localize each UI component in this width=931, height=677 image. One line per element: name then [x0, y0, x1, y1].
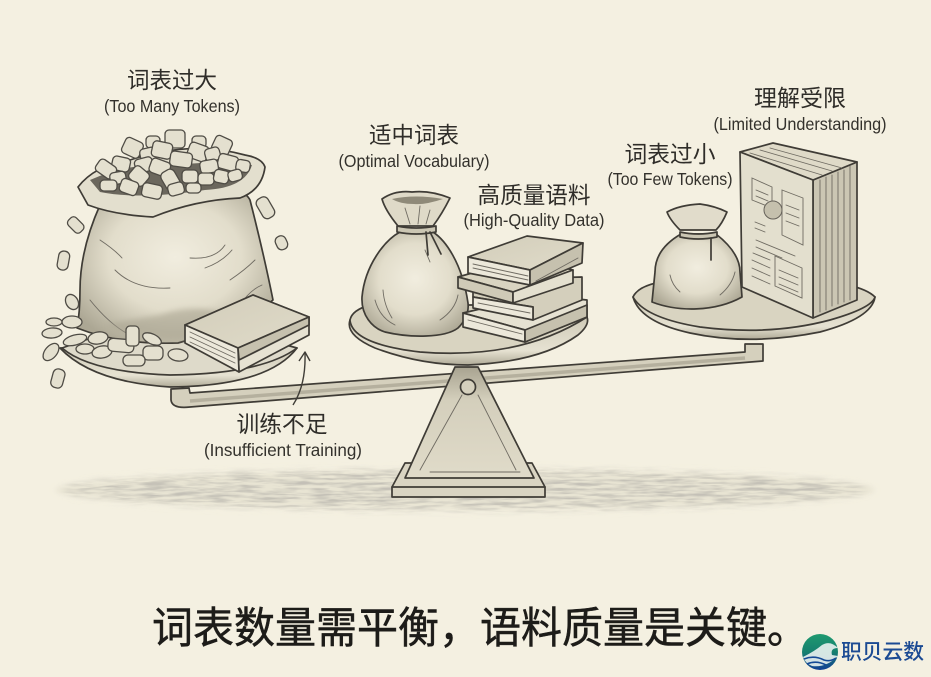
ground shadow: [55, 470, 875, 510]
logo: [802, 634, 924, 670]
spilled tokens: [40, 292, 189, 366]
label: optimal vocabulary: (Optimal Vocabulary): [338, 151, 490, 171]
left plate: [60, 348, 297, 387]
title: 词表数量需平衡，语料质量是关键。: [152, 605, 808, 653]
label: too many tokens: 词表过大: [127, 67, 217, 93]
label: high-quality data: 高质量语料: [478, 182, 590, 208]
tokens in bag: [94, 130, 251, 200]
left pan with overflowing bag: [40, 130, 309, 389]
cover illustration: [752, 178, 803, 298]
thin book: [185, 295, 309, 372]
right pan with small bag and thick book: [633, 143, 875, 339]
label: too many tokens: (Too Many Tokens): [104, 96, 240, 116]
label: too few tokens: [608, 141, 732, 189]
fulcrum stand: [392, 367, 545, 497]
label: optimal vocabulary: [338, 122, 490, 171]
right plate: [633, 297, 875, 339]
middle pan with bag and books: [349, 192, 588, 365]
logo icon: [802, 634, 838, 670]
pivot: [460, 380, 476, 394]
flying tokens: [50, 195, 289, 389]
label: too few tokens: (Too Few Tokens): [608, 169, 732, 189]
label: high-quality data: [464, 182, 604, 230]
balance beam: [171, 344, 763, 407]
thick book: [740, 143, 857, 318]
arrow: insufficient training: [293, 352, 310, 405]
logo text: 职贝云数: [841, 641, 924, 664]
medium bag: [362, 232, 468, 336]
label: too many tokens: [104, 67, 240, 116]
sack rim: [78, 149, 265, 217]
book stack: [458, 236, 587, 342]
label: insufficient training: [204, 411, 362, 460]
label: limited understanding: [714, 85, 886, 134]
label: insufficient training: 训练不足: [236, 411, 328, 437]
label: optimal vocabulary: 适中词表: [369, 122, 459, 148]
label: limited understanding: 理解受限: [754, 85, 846, 111]
label: limited understanding: (Limited Understanding): [714, 114, 886, 134]
small bag: [652, 234, 742, 309]
label: too few tokens: 词表过小: [624, 141, 716, 167]
label: insufficient training: (Insufficient Training): [204, 440, 362, 460]
middle plate: [349, 317, 588, 365]
label: high-quality data: (High-Quality Data): [464, 210, 604, 230]
big bag body: [77, 187, 273, 343]
